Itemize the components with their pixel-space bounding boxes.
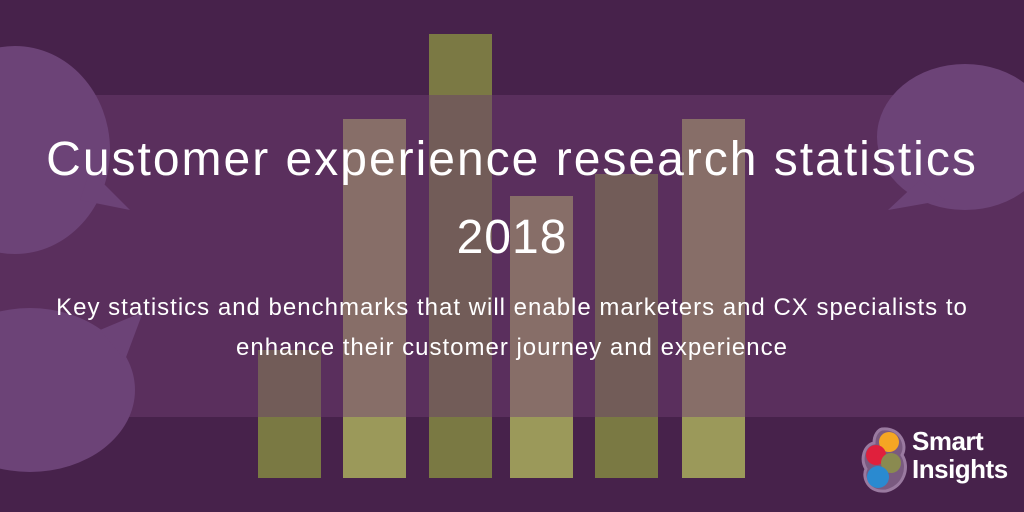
logo <box>862 426 1008 493</box>
subtitle: enhance their customer journey and experience <box>236 334 788 361</box>
title: Customer experience research statistics <box>46 133 978 186</box>
year: 2018 <box>457 211 567 264</box>
bar chart <box>258 34 745 478</box>
subtitle <box>56 294 968 361</box>
logo: Smart <box>912 426 983 456</box>
subtitle: Key statistics and benchmarks that will enable marketers and CX specialists to <box>56 294 968 321</box>
bubble: top left <box>0 46 130 254</box>
bubble: right <box>877 64 1024 210</box>
bubble: bottom left <box>0 308 143 472</box>
logo: Insights <box>912 454 1008 484</box>
